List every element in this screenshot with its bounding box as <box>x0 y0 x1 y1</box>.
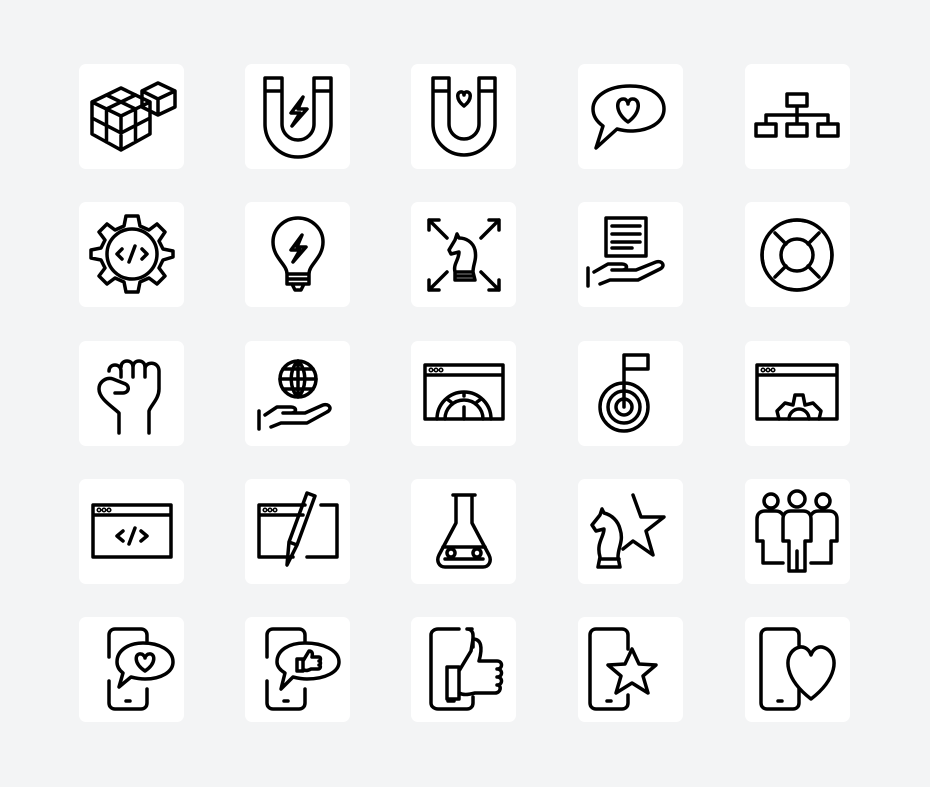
icon: browser gear <box>745 341 850 446</box>
icon: browser gauge <box>411 341 516 446</box>
icon: magnet heart <box>411 64 516 169</box>
icon: phone thumbs bubble <box>245 617 350 722</box>
icon: knight arrows <box>411 202 516 307</box>
icon: hand globe <box>245 341 350 446</box>
icon: star knight <box>578 479 683 584</box>
icon: phone heart bubble <box>79 617 184 722</box>
icon: team <box>745 479 850 584</box>
icon: phone heart <box>745 617 850 722</box>
icon: flask <box>411 479 516 584</box>
icon: magnet bolt <box>245 64 350 169</box>
icon: bulb bolt <box>245 202 350 307</box>
icon: phone thumbs up <box>411 617 516 722</box>
icon: hand holding browser <box>578 202 683 307</box>
icon: browser pencil <box>245 479 350 584</box>
icon: speech heart <box>578 64 683 169</box>
icon: browser code <box>79 479 184 584</box>
icon: fist <box>79 341 184 446</box>
icon: lifebuoy <box>745 202 850 307</box>
icon: target flag <box>578 341 683 446</box>
icon: sitemap <box>745 64 850 169</box>
icon: cubes <box>79 64 184 169</box>
icon: gear code <box>79 202 184 307</box>
icon: phone star <box>578 617 683 722</box>
